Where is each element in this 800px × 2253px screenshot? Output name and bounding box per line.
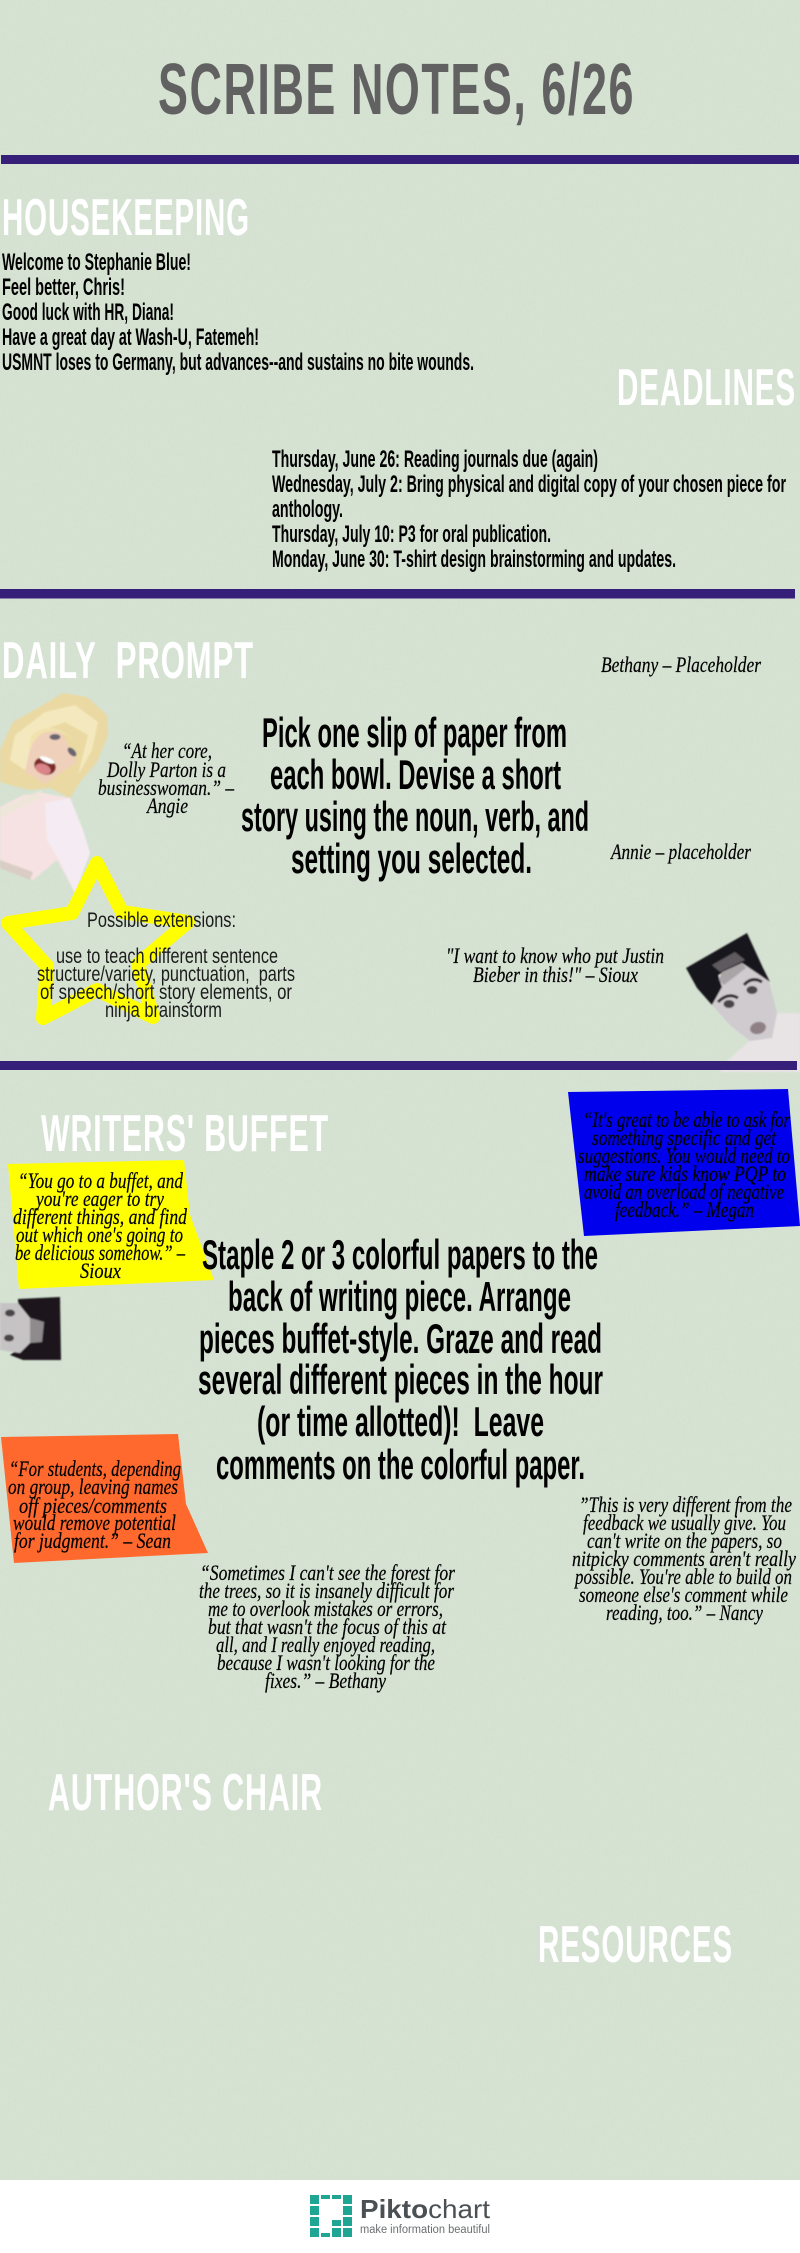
note: yellow sticky, Sioux (8, 1160, 214, 1289)
text block: possible extensions (37, 909, 295, 1022)
note: blue sticky, Megan (568, 1089, 800, 1236)
heading: housekeeping: HOUSEKEEPING (2, 189, 250, 247)
quote: Sioux on Justin Bieber: Bieber in this!" – Sioux (473, 962, 638, 987)
text block: housekeeping notes: Good luck with HR, Diana! (2, 299, 174, 326)
text block: deadline list: Thursday, July 10: P3 for oral publication. (272, 521, 551, 548)
text block: buffet instructions: (or time allotted)! Leave (257, 1398, 544, 1445)
note: yellow sticky, Sioux: be delicious somehow.” – (15, 1240, 186, 1265)
quote: Bethany: “Sometimes I can't see the forest for (200, 1560, 455, 1585)
quote: Bethany (199, 1560, 455, 1693)
text block: housekeeping notes: Feel better, Chris! (2, 274, 125, 301)
text block: deadline list (272, 446, 786, 573)
note: orange sticky, Sean: for judgment.” – Sean (14, 1528, 171, 1553)
quote: Bethany placeholder: Bethany – Placeholder (601, 652, 761, 677)
quote: Annie placeholder: Annie – placeholder (609, 839, 751, 864)
note: yellow sticky, Sioux: “You go to a buffet, and (18, 1168, 184, 1193)
image: Dolly Parton illustration (0, 693, 108, 893)
image: Justin Bieber illustration (686, 933, 800, 1072)
text block: possible extensions: ninja brainstorm (105, 999, 222, 1022)
quote: Nancy (572, 1492, 796, 1625)
note: yellow sticky, Sioux: different things, and find (13, 1204, 188, 1229)
text block: possible extensions: structure/variety, punctuation, parts (37, 963, 295, 986)
panel: deadlines (272, 359, 796, 573)
text block: deadline list: anthology. (272, 496, 343, 523)
image: sideways Justin Bieber illustration (0, 1297, 61, 1360)
icon: yellow star (8, 863, 188, 1018)
text block: prompt instructions: each bowl. Devise a short (270, 751, 561, 798)
icon: Piktochart logo (310, 2195, 352, 2237)
quote: Bethany: the trees, so it is insanely difficult for (199, 1578, 454, 1603)
text block: possible extensions: use to teach different sentence (56, 945, 278, 968)
quote: Bethany: because I wasn't looking for the (217, 1650, 435, 1675)
text block: prompt instructions: setting you selected. (291, 835, 532, 882)
heading: author's chair: AUTHOR'S CHAIR (48, 1764, 323, 1822)
text block: buffet instructions (198, 1231, 603, 1488)
quote: Bethany: fixes.” – Bethany (265, 1668, 386, 1693)
note: orange sticky, Sean: off pieces/comments (19, 1493, 167, 1518)
quote: Sioux on Justin Bieber: "I want to know who put Justin (446, 943, 664, 968)
text block: housekeeping notes (2, 249, 474, 376)
note: blue sticky, Megan: feedback.” – Megan (615, 1197, 754, 1222)
note: orange sticky, Sean (1, 1434, 208, 1563)
quote: Sioux on Justin Bieber (446, 943, 664, 987)
note: orange sticky, Sean: on group, leaving names (8, 1474, 178, 1499)
quote: Bethany: but that wasn't the focus of this at (208, 1614, 447, 1639)
text block: possible extensions: Possible extensions: (87, 909, 236, 932)
note: orange sticky, Sean: “For students, depending (9, 1456, 181, 1481)
heading: daily prompt: DAILY PROMPT (2, 632, 254, 690)
note: yellow sticky, Sioux: Sioux (80, 1258, 121, 1283)
quote: Bethany: me to overlook mistakes or errors, (208, 1596, 443, 1621)
note: yellow sticky, Sioux: out which one's going to (16, 1222, 183, 1247)
text block: housekeeping notes: Have a great day at Wash-U, Fatemeh! (2, 324, 259, 351)
text block: housekeeping notes: Welcome to Stephanie Blue! (2, 249, 191, 276)
logo tagline: make information beautiful (360, 2224, 490, 2236)
text block: housekeeping notes: USMNT loses to Germany, but advances--and sustains no bite wounds. (2, 349, 474, 376)
text block: prompt instructions (241, 709, 589, 882)
logo wordmark: Piktochart (360, 2194, 491, 2224)
panel: writers' buffet (0, 1089, 800, 1693)
quote: Bethany: all, and I really enjoyed reading, (216, 1632, 435, 1657)
quote: Angie: “At her core, (122, 738, 212, 763)
text block: prompt instructions: Pick one slip of paper from (262, 709, 567, 756)
footer (0, 2180, 800, 2253)
quote: Angie: businesswoman.” – (98, 775, 235, 800)
quote: Angie (98, 738, 235, 818)
note: orange sticky, Sean: would remove potential (13, 1510, 176, 1535)
text block: possible extensions: of speech/short story elements, or (40, 981, 292, 1004)
panel: housekeeping (2, 189, 474, 376)
note: yellow sticky, Sioux: you're eager to try (34, 1186, 164, 1211)
panel: daily prompt (0, 632, 800, 1072)
quote: Angie: Dolly Parton is a (106, 757, 226, 782)
quote: Angie: Angie (145, 793, 188, 818)
heading: writers' buffet: WRITERS' BUFFET (41, 1105, 329, 1163)
